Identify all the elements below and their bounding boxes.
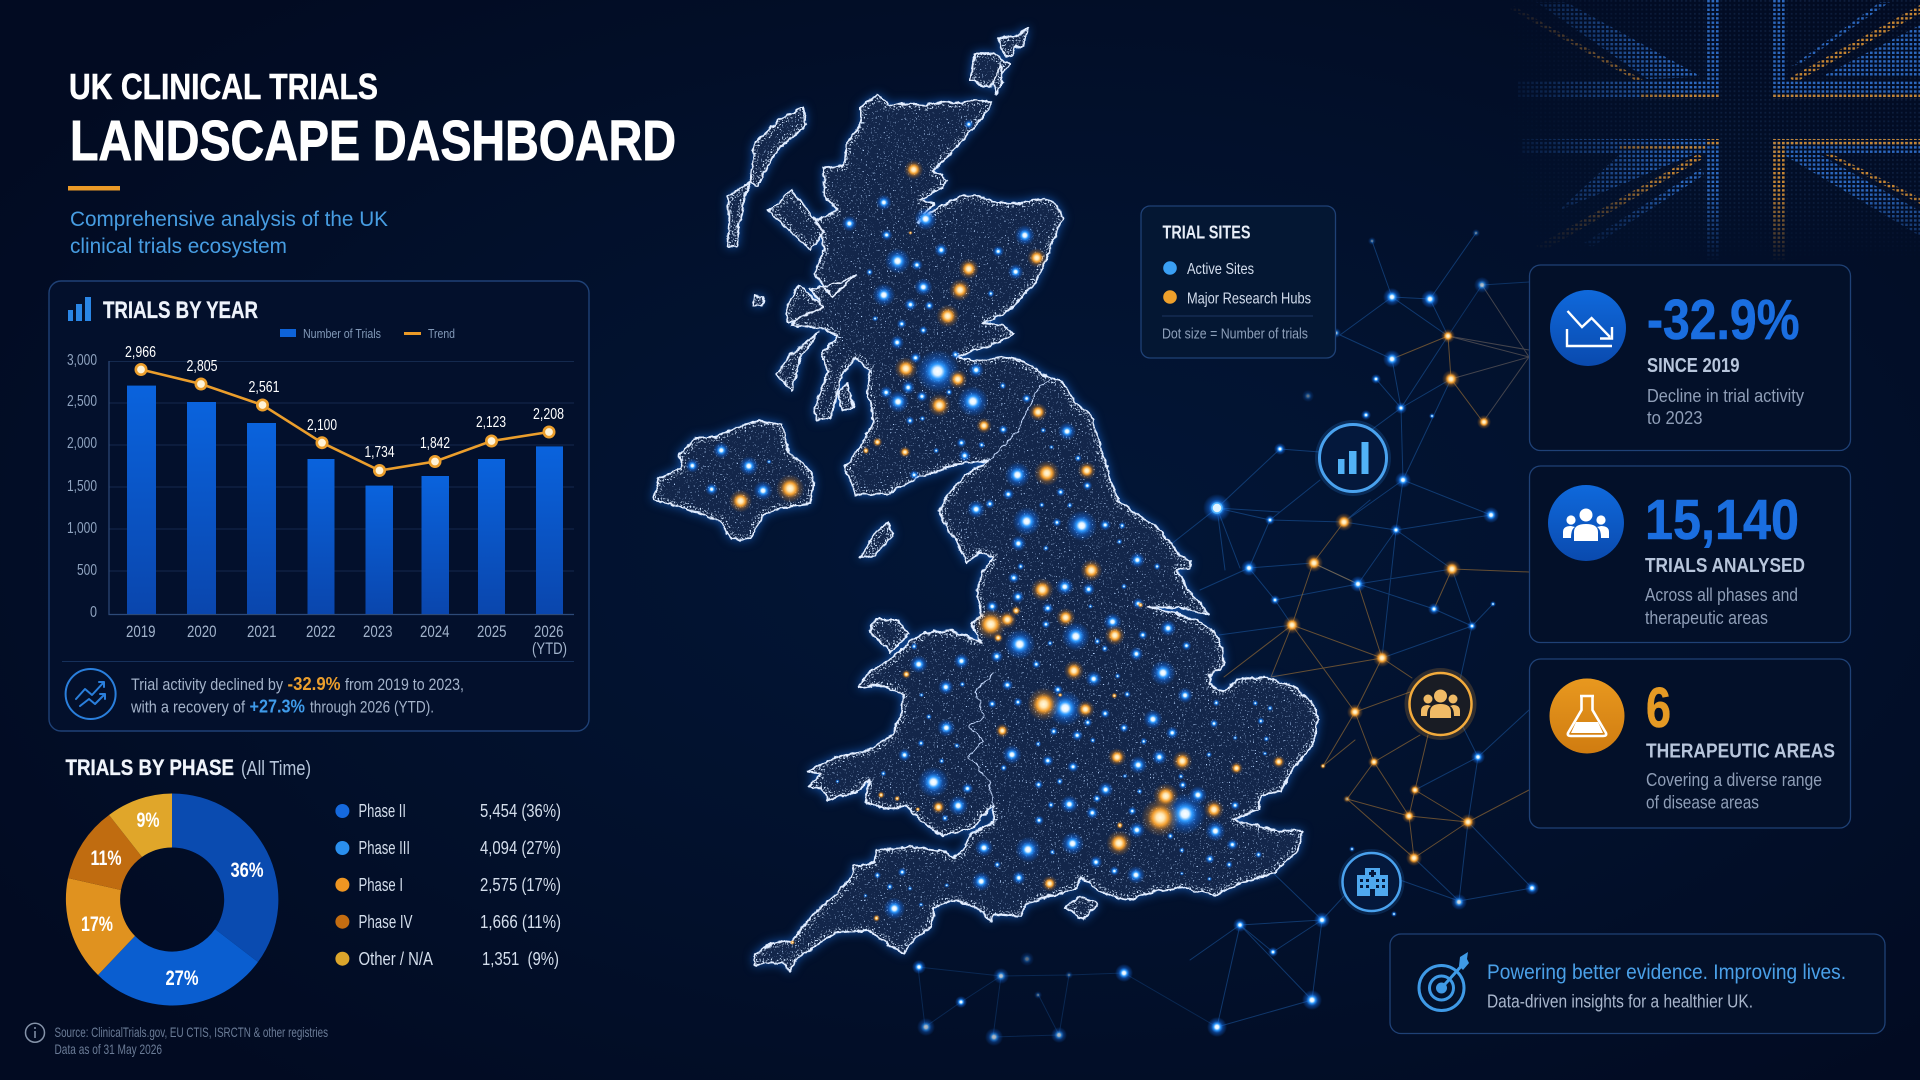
trend line: 2,561 — [248, 379, 280, 396]
mull — [786, 286, 824, 323]
icon: people — [1548, 485, 1624, 561]
takeaway text: +27.3% — [250, 696, 305, 716]
phase legend: Phase II — [358, 801, 406, 821]
phase legend: 1,666 (11%) — [480, 912, 561, 932]
source note: Source: ClinicalTrials.gov, EU CTIS, ISRCTN & other registries — [54, 1024, 328, 1040]
bar chart: 2025 — [477, 622, 506, 641]
map blue site dots south — [835, 552, 1273, 920]
bar chart: (YTD) — [532, 639, 567, 658]
stat value: -32.9% — [1647, 288, 1800, 352]
trend line: 2,123 — [476, 414, 506, 431]
donut chart: 11% — [90, 847, 122, 870]
takeaway text — [130, 674, 464, 716]
chart legend — [280, 326, 455, 341]
takeaway text: through 2026 (YTD). — [310, 698, 434, 716]
donut chart — [66, 793, 278, 1005]
phase legend: 1,351 (9%) — [482, 949, 559, 969]
phase legend: 5,454 (36%) — [480, 801, 561, 821]
bar chart — [67, 352, 574, 658]
icon: rising trend — [66, 669, 116, 719]
stat label: THERAPEUTIC AREAS — [1646, 740, 1835, 762]
bar chart: 2022 — [306, 622, 336, 641]
stat label: TRIALS ANALYSED — [1645, 555, 1805, 577]
islay and jura — [777, 332, 819, 391]
takeaway text: with a recovery of — [130, 698, 245, 716]
phase legend: Phase I — [358, 875, 403, 895]
title accent bar — [68, 186, 120, 190]
card: trials analysed — [1530, 466, 1850, 642]
icon: flask — [1550, 678, 1624, 754]
heading: trials by phase: (All Time) — [241, 758, 311, 780]
outer hebrides — [727, 107, 806, 247]
network blue nodes — [912, 229, 1539, 1046]
bar chart: 2,000 — [67, 435, 97, 452]
donut chart: 27% — [166, 967, 199, 990]
icon: target — [1419, 952, 1469, 1010]
donut chart: 17% — [81, 913, 113, 936]
stat description — [1645, 585, 1798, 628]
card: decline since 2019 — [1530, 265, 1850, 450]
title line one: UK CLINICAL TRIALS — [69, 66, 378, 107]
borders — [968, 379, 1053, 806]
bar chart: 500 — [77, 562, 97, 579]
anglesey — [870, 620, 909, 652]
network icon: hospital — [1338, 849, 1404, 915]
heading: trials by year: TRIALS BY YEAR — [103, 297, 258, 324]
takeaway text: -32.9% — [288, 674, 340, 694]
skye — [769, 189, 824, 250]
network orange nodes — [1283, 329, 1491, 866]
trend line: 1,734 — [364, 444, 395, 461]
panel: trial sites legend — [1141, 206, 1336, 358]
takeaway text: from 2019 to 2023, — [345, 675, 464, 694]
trend line: 2,805 — [186, 358, 218, 375]
subtitle — [70, 208, 388, 258]
bar chart: 2024 — [420, 622, 450, 641]
phase legend: 4,094 (27%) — [480, 838, 561, 858]
stat description: of disease areas — [1646, 792, 1759, 812]
bar chart: 2023 — [363, 622, 392, 641]
phase legend: Phase III — [358, 838, 410, 858]
stat description: Decline in trial activity — [1647, 386, 1804, 406]
trend line: 1,842 — [420, 435, 450, 452]
map orange hub dots north — [729, 160, 1096, 512]
bar chart: 1,500 — [67, 478, 97, 495]
source note: Data as of 31 May 2026 — [54, 1041, 162, 1057]
subtitle: clinical trials ecosystem — [70, 235, 287, 258]
donut chart: 9% — [136, 809, 160, 832]
glowing network node — [1203, 494, 1231, 522]
map orange hub dots south — [790, 559, 1285, 945]
phase legend: 2,575 (17%) — [480, 875, 561, 895]
orkney — [971, 54, 1010, 87]
map blue site dots north — [685, 119, 1126, 551]
isle of man — [860, 522, 893, 557]
takeaway text: Trial activity declined by — [131, 675, 283, 694]
trend line: 2,208 — [533, 406, 564, 423]
chart legend: Trend — [428, 326, 455, 341]
stat label: SINCE 2019 — [1647, 355, 1740, 377]
donut chart: 36% — [230, 859, 264, 882]
phase legend — [335, 801, 561, 969]
bar chart: 2026 — [534, 622, 564, 641]
trend line — [125, 344, 564, 476]
map land outline — [654, 27, 1319, 972]
union jack dot pattern — [1480, 0, 1920, 262]
callout headline: Powering better evidence. Improving lives. — [1487, 961, 1846, 984]
panel: trial sites legend: Major Research Hubs — [1187, 290, 1311, 308]
isle of wight — [1065, 897, 1098, 920]
subtitle: Comprehensive analysis of the UK — [70, 208, 388, 231]
coll and tiree — [754, 296, 764, 305]
stat description — [1647, 386, 1804, 428]
network icon: bar chart — [1315, 420, 1391, 496]
trend line: 2,966 — [125, 344, 156, 361]
bar chart: 2021 — [247, 622, 276, 641]
title block — [69, 66, 676, 173]
bar chart: 2020 — [187, 622, 216, 641]
bar chart: 2,500 — [67, 393, 97, 410]
stat description — [1646, 770, 1822, 812]
title line two: LANDSCAPE DASHBOARD — [70, 109, 676, 173]
source note — [26, 1023, 328, 1057]
bar chart: 1,000 — [67, 520, 97, 537]
stat value: 6 — [1646, 676, 1671, 740]
bar chart: 3,000 — [67, 352, 97, 369]
stat description: therapeutic areas — [1645, 608, 1768, 628]
panel: trials by year — [49, 281, 589, 731]
card: therapeutic areas — [1530, 659, 1850, 828]
heading: trials by phase: TRIALS BY PHASE — [66, 755, 234, 780]
arran — [838, 384, 854, 411]
phase legend: Phase IV — [358, 912, 412, 932]
bar chart: 2019 — [126, 622, 156, 641]
phase legend: Other / N/A — [358, 949, 433, 969]
stat description: Covering a diverse range — [1646, 770, 1822, 790]
northern ireland — [654, 421, 814, 539]
stat description: Across all phases and — [1645, 585, 1798, 605]
shetland — [994, 27, 1028, 94]
bar chart: 0 — [90, 604, 97, 621]
icon: downward trend — [1550, 290, 1626, 366]
callout: better evidence — [1390, 934, 1885, 1034]
panel: trial sites legend: Dot size = Number of trials — [1162, 326, 1308, 342]
panel: trial sites legend: Active Sites — [1187, 261, 1254, 278]
stat description: to 2023 — [1647, 408, 1702, 428]
network constellation lines — [918, 233, 1532, 1037]
UK map — [654, 27, 1319, 972]
callout subline: Data-driven insights for a healthier UK. — [1487, 992, 1753, 1012]
chart legend: Number of Trials — [303, 326, 381, 341]
stat value: 15,140 — [1645, 488, 1799, 552]
icon: bars — [68, 297, 91, 321]
network icon: people — [1404, 668, 1476, 740]
panel: trial sites legend: TRIAL SITES — [1162, 222, 1250, 242]
trend line: 2,100 — [307, 417, 337, 434]
